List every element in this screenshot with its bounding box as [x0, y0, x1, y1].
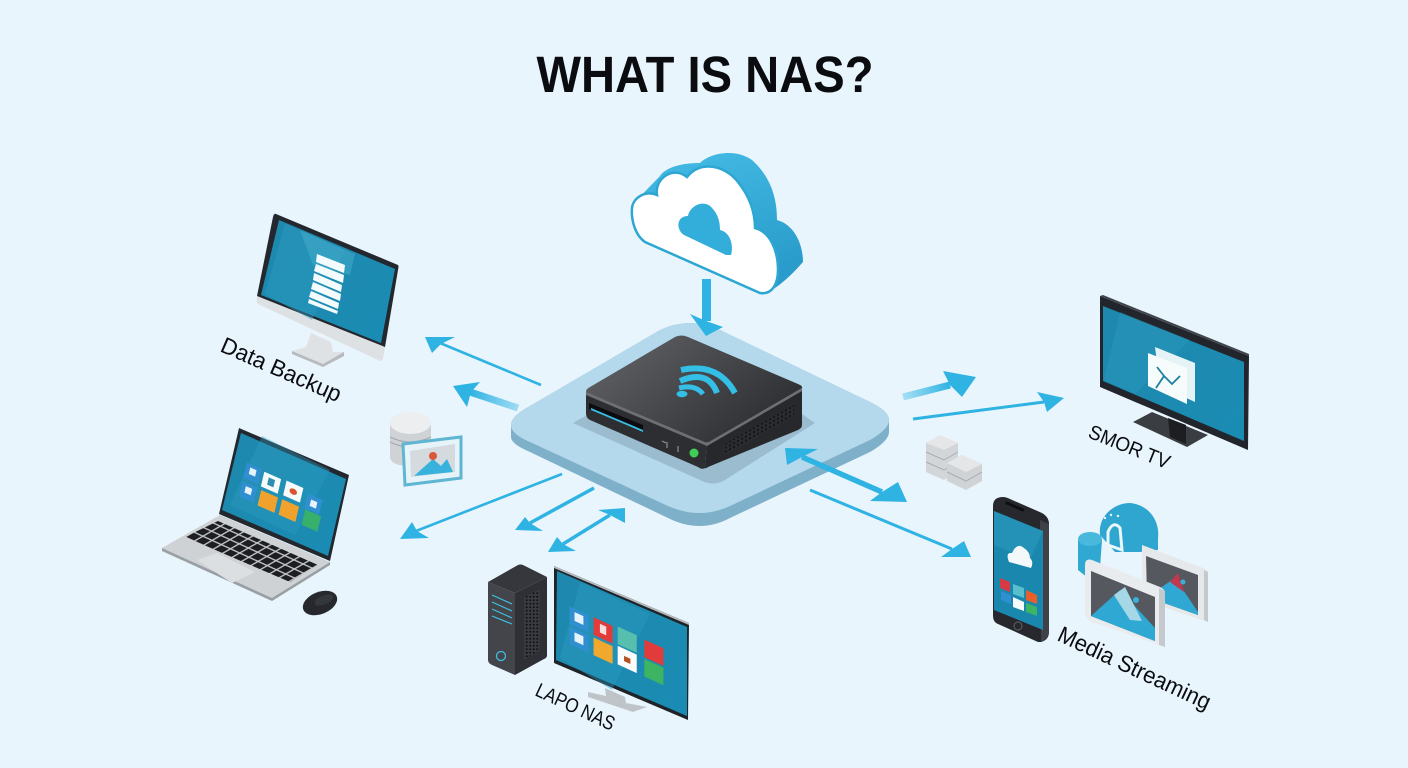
stand — [588, 688, 647, 712]
arrow: cloud to NAS — [690, 279, 723, 336]
icon: database and picture — [390, 412, 461, 485]
icon: cloud — [632, 153, 803, 293]
database cylinder — [390, 412, 431, 466]
icon: NAS device — [586, 336, 802, 469]
monitor body — [257, 214, 398, 361]
arrow: two-way to server stack — [785, 448, 907, 502]
inner cloud glyph — [678, 204, 732, 255]
label: LAPO NAS: LAPO NAS — [532, 680, 618, 735]
icon: smartphone — [993, 497, 1049, 642]
media badge — [1100, 503, 1158, 552]
laptop base — [162, 515, 330, 598]
icon: server stacks — [926, 435, 982, 490]
vent grille — [723, 405, 794, 456]
arrow: two-way desktop NAS — [548, 508, 625, 552]
icon: media streaming cluster — [1078, 503, 1208, 647]
monitor stand — [292, 333, 344, 367]
icon: laptop — [162, 428, 349, 601]
server icon on screen — [308, 254, 345, 314]
app tiles — [239, 462, 326, 532]
arrow: to phone — [810, 490, 971, 557]
stand — [1133, 412, 1208, 447]
arrow: to data backup — [425, 337, 541, 385]
cloud on phone — [1008, 546, 1032, 568]
app tiles — [569, 604, 663, 687]
front photo — [1085, 560, 1165, 647]
panel: central platform — [511, 323, 889, 526]
label: Data Backup: Data Backup — [217, 332, 346, 407]
back photo — [1142, 545, 1208, 622]
drive slot — [589, 403, 643, 431]
port marks — [662, 441, 678, 452]
arrow: thick to data backup — [453, 382, 518, 408]
icon: mouse — [299, 586, 341, 620]
app tiles — [1000, 578, 1037, 616]
icon: smart TV — [1100, 295, 1249, 450]
arrow: to laptop — [400, 474, 562, 539]
icon: desktop monitor — [554, 566, 689, 720]
picture frame — [403, 437, 461, 485]
icon: desktop tower — [488, 564, 547, 675]
arrow: to TV — [913, 392, 1064, 419]
folder icon — [1148, 347, 1195, 404]
media cylinder — [1078, 532, 1102, 578]
label: Media Streaming: Media Streaming — [1054, 621, 1215, 715]
label: SMOR TV: SMOR TV — [1085, 421, 1174, 474]
laptop screen — [219, 428, 349, 561]
icon: data backup monitor — [257, 214, 398, 367]
status LED — [690, 448, 698, 458]
arrow: to desktop NAS — [515, 488, 594, 531]
arrow: thick to TV — [903, 371, 976, 397]
title: WHAT IS NAS? — [536, 46, 874, 103]
icon: wifi — [676, 368, 735, 397]
